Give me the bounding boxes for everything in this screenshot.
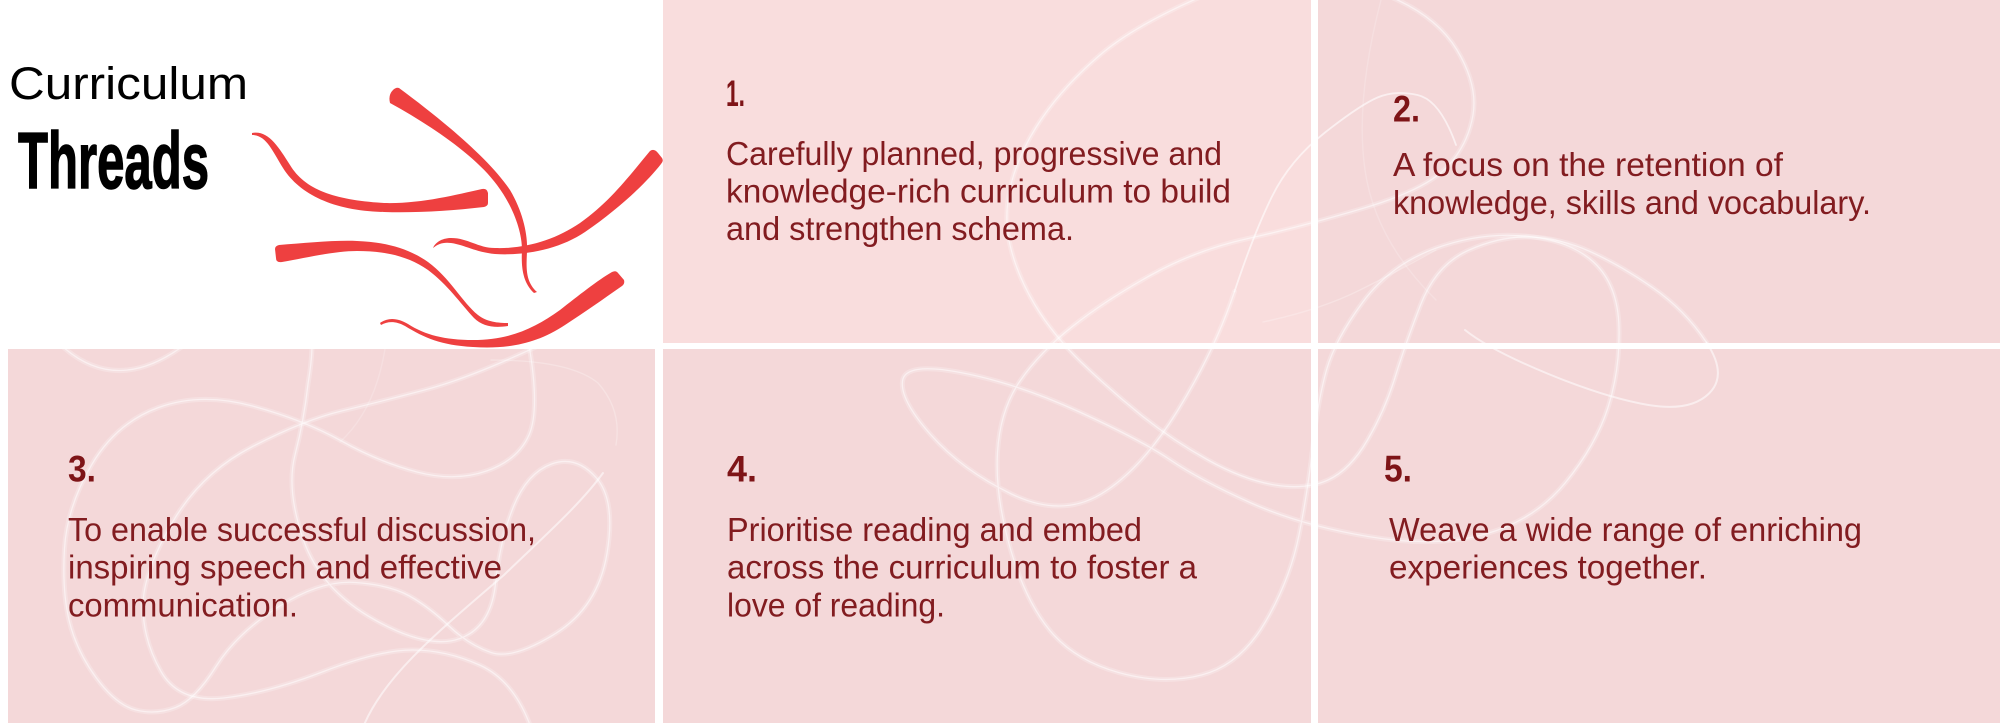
- body text 1: knowledge-rich curriculum to build: [726, 172, 1231, 210]
- panel 5 text: [1384, 448, 1862, 586]
- panel 4 background: [663, 349, 1311, 723]
- body text 3: [68, 511, 536, 624]
- number 4: 4.: [727, 448, 757, 490]
- body text 4: [727, 511, 1198, 624]
- body text 4: love of reading.: [727, 586, 945, 624]
- thread: left curve, thick at right: [252, 133, 488, 212]
- panel 1 background: [663, 0, 1311, 343]
- white thread scribble in panel 3: [62, 345, 617, 725]
- title line: Threads: Threads: [18, 116, 209, 205]
- thread: bottom, thick at right: [380, 271, 624, 347]
- body text 2: [1393, 146, 1871, 221]
- body text 3: inspiring speech and effective: [68, 548, 502, 586]
- number 1: 1.: [726, 73, 745, 114]
- body text 3: communication.: [68, 586, 298, 624]
- number 3: 3.: [68, 448, 96, 490]
- panel 3 text: [68, 448, 536, 624]
- body text 1: and strengthen schema.: [726, 210, 1074, 247]
- body text 3: To enable successful discussion,: [68, 511, 536, 548]
- white thread scribble across panels 1, 2, 4 and 5: [902, 0, 1718, 679]
- number 2: 2.: [1393, 88, 1420, 130]
- title: [9, 58, 248, 205]
- panel 2 background: [1318, 0, 2000, 343]
- icon: red tapered threads: [252, 88, 663, 347]
- thread: right, thick at top right: [433, 150, 663, 254]
- panel 4 text: [727, 448, 1198, 624]
- thread: top, thick at upper left: [389, 88, 537, 293]
- number 5: 5.: [1384, 448, 1412, 490]
- panel 2 text: [1393, 88, 1871, 221]
- body text 1: [726, 135, 1231, 247]
- body text 5: experiences together.: [1389, 548, 1707, 586]
- body text 4: Prioritise reading and embed: [727, 511, 1142, 548]
- body text 5: Weave a wide range of enriching: [1389, 511, 1862, 548]
- panel 3 background: [8, 349, 655, 723]
- title line: Curriculum: Curriculum: [9, 58, 248, 109]
- body text 1: Carefully planned, progressive and: [726, 135, 1222, 172]
- body text 2: A focus on the retention of: [1393, 146, 1784, 183]
- body text 2: knowledge, skills and vocabulary.: [1393, 184, 1871, 221]
- panel 5 background: [1318, 349, 2000, 723]
- body text 5: [1389, 511, 1862, 586]
- panel 1 text: [726, 73, 1231, 247]
- body text 4: across the curriculum to foster a: [727, 548, 1198, 586]
- thread: middle, thick at left: [275, 241, 508, 327]
